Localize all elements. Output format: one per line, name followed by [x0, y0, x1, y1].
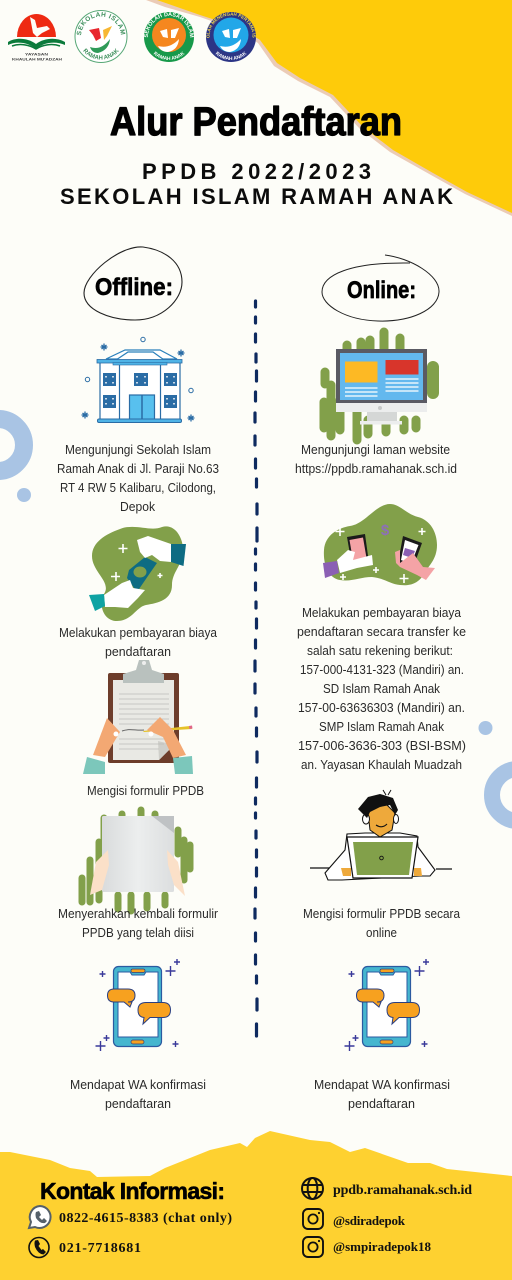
text: WA confirmation, offline — [70, 1077, 206, 1111]
icon: clipboard with writing hands — [83, 660, 193, 774]
text: pay offline — [59, 625, 218, 659]
contact: Instagram SMP: @smpiradepok18 — [333, 1239, 432, 1254]
logo: Sekolah Dasar Islam — [144, 12, 194, 62]
text: pay offline: Melakukan pembayaran biaya — [59, 625, 218, 640]
logo: Sekolah Dasar Islam: RAMAH ANAK — [154, 51, 185, 60]
text: WA confirmation, online — [314, 1077, 450, 1111]
text: visit website: Mengunjungi laman website — [301, 442, 450, 457]
logo: Yayasan Khaulah Mu'adzah — [8, 14, 65, 61]
contact: website — [302, 1178, 472, 1199]
decorative ring right — [478, 721, 512, 821]
icon: hands holding form — [82, 810, 190, 911]
text: pay online — [297, 605, 466, 772]
icon: transfer payment on phones: $ — [381, 522, 390, 539]
logo: Sekolah Dasar Islam: SEKOLAH DASAR ISLAM — [144, 12, 194, 38]
contact: website: ppdb.ramahanak.sch.id — [333, 1183, 472, 1198]
text: visit school: Depok — [120, 499, 155, 514]
icon: phone with chat bubbles, online — [344, 959, 429, 1051]
text: pay online: Melakukan pembayaran biaya — [302, 605, 462, 620]
icon: school building — [82, 337, 194, 422]
heading: Online: Online: — [347, 277, 416, 304]
column divider dashed line — [255, 301, 257, 1036]
subtitle: PPDB 2022/2023 — [142, 159, 371, 184]
contact: WhatsApp — [29, 1206, 232, 1228]
text: visit website — [295, 442, 457, 476]
contact: Instagram SD — [303, 1209, 406, 1229]
logo: Sekolah Menengah Pertama Islam: RAMAH ANAK — [216, 51, 247, 60]
footer panel — [0, 1131, 512, 1280]
text: WA confirmation, online: pendaftaran — [348, 1096, 415, 1111]
text: fill form online — [303, 906, 461, 940]
text: pay online: an. Yayasan Khaulah Muadzah — [301, 757, 462, 772]
contact: telephone — [29, 1238, 141, 1258]
icon: boy with laptop — [310, 790, 452, 880]
contact: WhatsApp: 0822-4615-8383 (chat only) — [59, 1211, 232, 1226]
contact: telephone: 021-7718681 — [59, 1241, 141, 1256]
heading: contact information: Kontak Informasi: — [40, 1178, 225, 1204]
text: pay online: 157-006-3636-303 (BSI-BSM) — [298, 738, 466, 753]
text: pay offline: pendaftaran — [105, 644, 171, 659]
text: return form: PPDB yang telah diisi — [82, 925, 194, 940]
heading: Offline — [84, 247, 182, 320]
text: pay online: salah satu rekening berikut: — [307, 643, 453, 658]
contact: Instagram SMP — [303, 1237, 432, 1257]
icon: website on monitor — [324, 332, 433, 440]
text: return form — [58, 906, 219, 940]
text: WA confirmation, offline: Mendapat WA konfirmasi — [70, 1077, 206, 1092]
logo: Sekolah Menengah Pertama Islam — [206, 12, 256, 62]
logo: Yayasan Khaulah Mu'adzah: KHAULAH MU'ADZAH — [12, 56, 62, 62]
heading: Online — [322, 255, 439, 321]
logo: Sekolah Islam Ramah Anak: SEKOLAH ISLAM — [76, 12, 126, 36]
text: WA confirmation, offline: pendaftaran — [105, 1096, 171, 1111]
heading: Offline: Offline: — [95, 274, 173, 301]
decorative ring left — [0, 419, 31, 502]
text: fill form online: Mengisi formulir PPDB secara — [303, 906, 461, 921]
text: pay online: SMP Islam Ramah Anak — [319, 719, 444, 734]
logo: Sekolah Islam Ramah Anak — [74, 10, 128, 63]
text: pay online: 157-000-4131-323 (Mandiri) an. — [300, 662, 464, 677]
text: visit school: RT 4 RW 5 Kalibaru, Cilodong, — [60, 480, 216, 495]
icon: phone with chat bubbles, offline — [96, 959, 180, 1051]
icon: cash payment hands — [89, 526, 186, 621]
text: visit website: https://ppdb.ramahanak.sch.id — [295, 461, 457, 476]
subtitle: SEKOLAH ISLAM RAMAH ANAK — [60, 184, 453, 209]
icon: transfer payment on phones — [323, 504, 437, 585]
text: visit school: Mengunjungi Sekolah Islam — [65, 442, 211, 457]
text: pay online: 157-00-63636303 (Mandiri) an. — [298, 700, 465, 715]
title: Alur Pendaftaran — [110, 100, 402, 144]
logo: Sekolah Islam Ramah Anak: RAMAH ANAK — [83, 48, 119, 60]
text: return form: Menyerahkan kembali formulir — [58, 906, 219, 921]
contact: Instagram SD: @sdiradepok — [333, 1213, 406, 1228]
text: fill form: Mengisi formulir PPDB — [87, 783, 204, 798]
logo: Yayasan Khaulah Mu'adzah: YAYASAN — [25, 52, 48, 56]
text: pay online: SD Islam Ramah Anak — [323, 681, 440, 696]
text: WA confirmation, online: Mendapat WA konfirmasi — [314, 1077, 450, 1092]
text: pay online: pendaftaran secara transfer ke — [297, 624, 466, 639]
subtitle — [60, 159, 453, 209]
decorative torn paper corner — [146, 0, 512, 216]
text: fill form online: online — [366, 925, 397, 940]
text: visit school: Ramah Anak di Jl. Paraji No.63 — [57, 461, 219, 476]
text: visit school — [57, 442, 219, 514]
